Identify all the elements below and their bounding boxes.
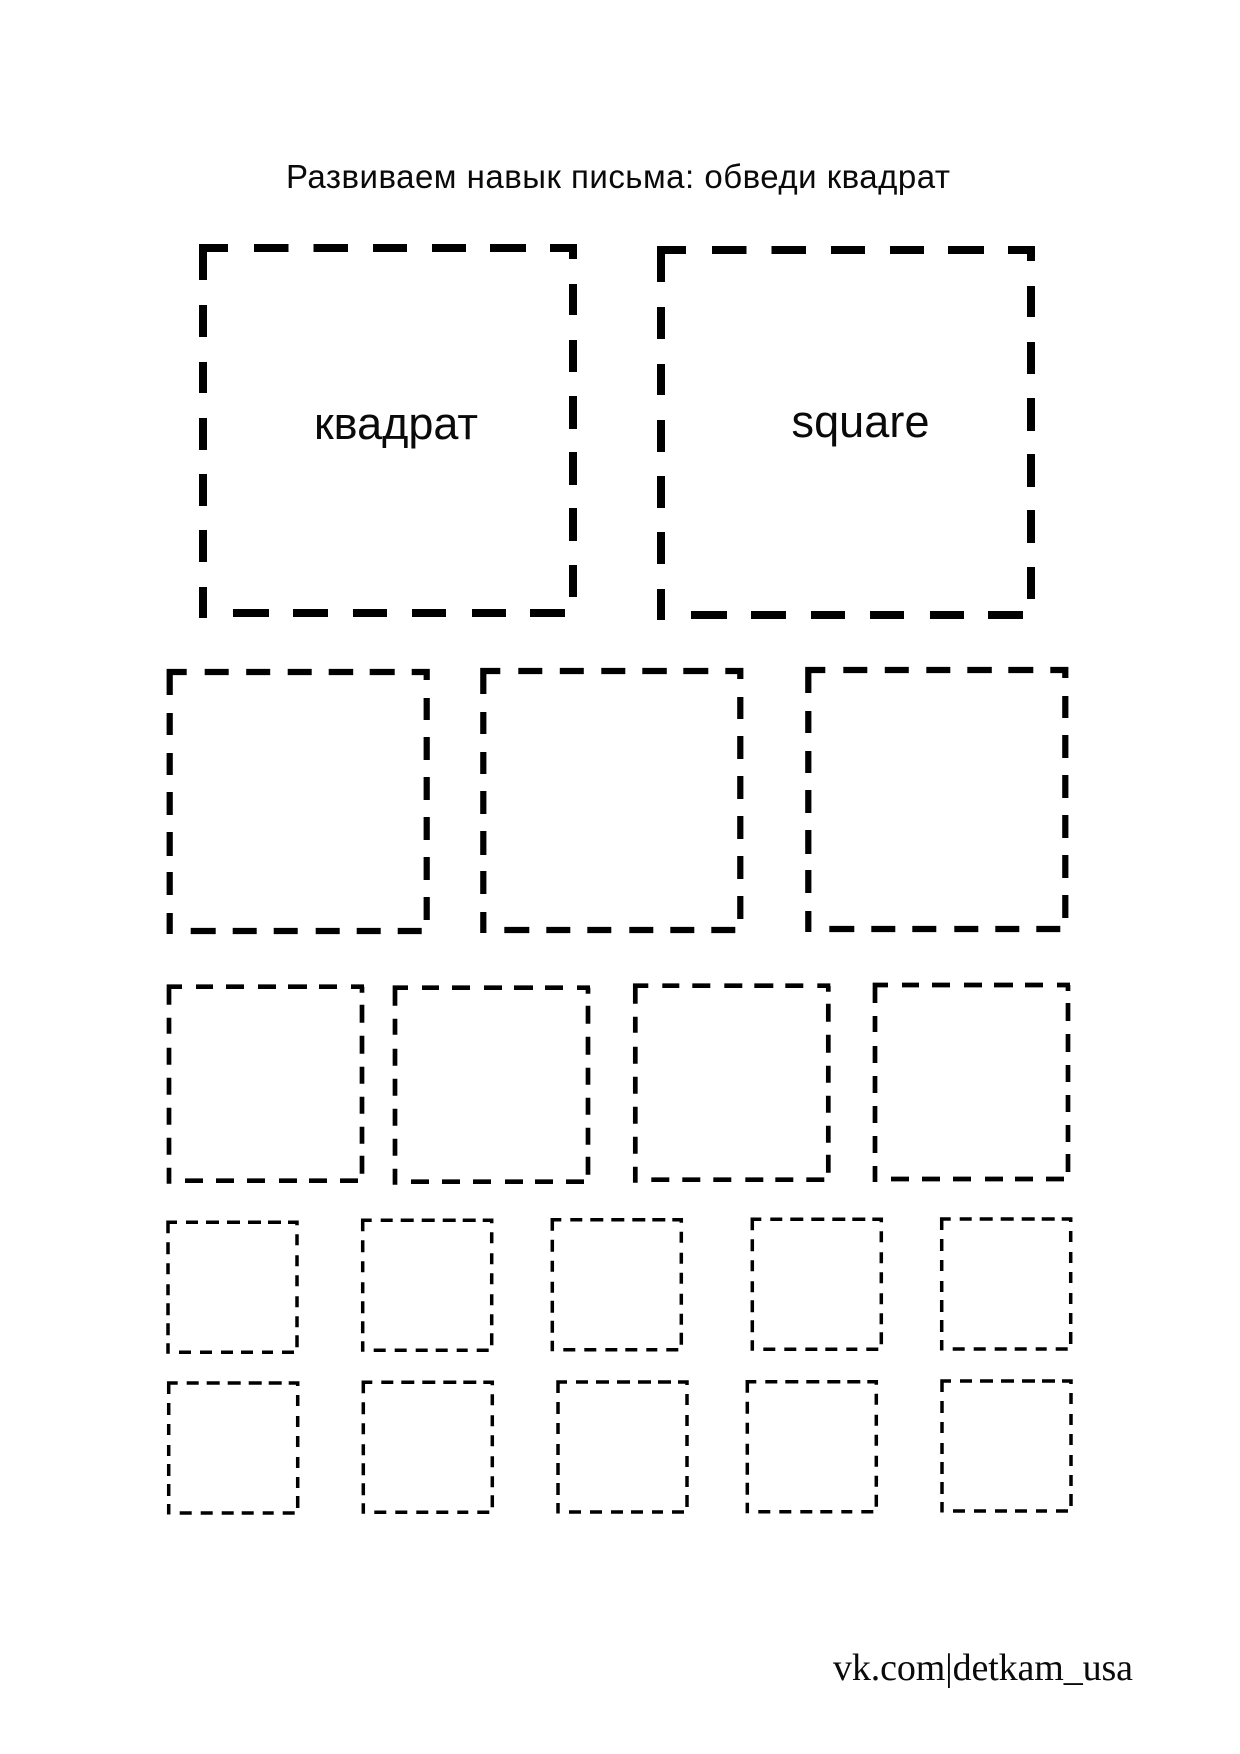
word: square: square: [792, 396, 930, 447]
dashed square 3-4: [873, 983, 1070, 1182]
row 3: four dashed squares: [167, 983, 1070, 1185]
dashed square 3-2: [393, 985, 590, 1185]
dashed square 3-1: [167, 984, 364, 1184]
panel: large dashed square with English word: [657, 246, 1035, 620]
dashed square 5-4: [746, 1380, 878, 1513]
panel: large dashed square with Russian word: [199, 244, 577, 618]
dashed square 4-4: [751, 1218, 883, 1351]
title: Развиваем навык письма: обведи квадрат: [286, 158, 950, 195]
dashed square 2-3: [805, 667, 1068, 932]
row 2: three medium dashed squares: [167, 667, 1068, 934]
large dashed square outline, left: [199, 244, 577, 618]
dashed square 5-3: [556, 1380, 689, 1514]
dashed square 4-1: [166, 1221, 299, 1354]
dashed square 5-5: [940, 1379, 1073, 1512]
row 5: five small dashed squares: [167, 1379, 1073, 1514]
dashed square 4-3: [551, 1218, 683, 1351]
word: квадрат: квадрат: [314, 398, 478, 449]
row 4: five small dashed squares: [166, 1217, 1072, 1354]
dashed square 5-1: [167, 1381, 299, 1514]
dashed square 3-3: [633, 983, 830, 1183]
dashed square 4-2: [361, 1219, 493, 1352]
dashed square 5-2: [362, 1381, 494, 1514]
dashed square 2-2: [480, 668, 743, 933]
dashed square 2-1: [167, 669, 430, 934]
footer credit: vk.com|detkam_usa: [833, 1647, 1133, 1689]
dashed square 4-5: [940, 1217, 1072, 1350]
large dashed square outline, right: [657, 246, 1035, 620]
